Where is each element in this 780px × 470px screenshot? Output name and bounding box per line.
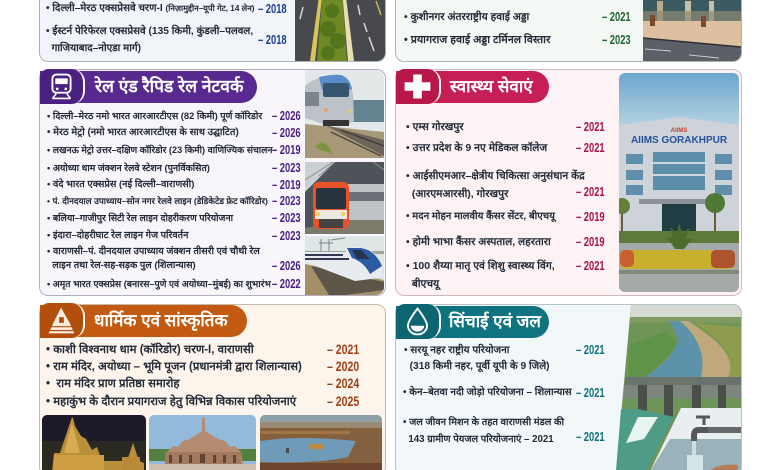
list item: ICMR RMRC: – 2021 — [576, 184, 605, 199]
list item: Homi Bhabha hospital: • होमी भाभा कैंसर अस्पताल, लहरतारा — [406, 236, 551, 248]
icon: temple — [40, 303, 85, 338]
list item: Kushinagar airport — [404, 9, 631, 24]
list item: Mahakumbh: • महाकुंभ के दौरान प्रयागराज हेतु विभिन्न विकास परियोजनाएं — [46, 396, 296, 408]
list item: Ballia-Ghazipur: – 2023 — [272, 210, 301, 225]
list item: Prayagraj airport: – 2023 — [602, 32, 631, 47]
photo: canal and water tap — [616, 305, 741, 470]
panel: religious and cultural — [39, 304, 386, 470]
list item: mother and child wing — [406, 258, 605, 290]
list item: freight corridor — [47, 193, 301, 208]
list item: Ken-Betwa link — [403, 385, 605, 400]
list item: Ayodhya station — [47, 160, 301, 175]
list item: AIIMS Gorakhpur: – 2021 — [576, 119, 605, 134]
list item: Namo Bharat: – 2026 — [272, 108, 301, 123]
list item: Kushinagar airport: – 2021 — [602, 9, 631, 24]
list item: Vande Bharat: – 2019 — [272, 177, 301, 192]
list item: Ram Mandir bhoomi pujan: • राम मंदिर, अयोध्या – भूमि पूजन (प्रधानमंत्री द्वारा शिलान्यास) — [46, 361, 302, 373]
list item: ICMR RMRC — [406, 169, 605, 200]
list item: Ken-Betwa link: • केन–बेतवा नदी जोड़ो परियोजना – शिलान्यास — [403, 387, 572, 398]
list item: nine medical colleges: – 2021 — [576, 140, 605, 155]
photo: expressway road — [295, 0, 385, 61]
heading: rail network: रेल एंड रैपिड रेल नेटवर्क — [95, 76, 243, 96]
list item: Kashi Vishwanath: • काशी विश्वनाथ धाम (कॉरिडोर) चरण-I, वाराणसी — [46, 344, 254, 356]
list item: Amrit Bharat: • अमृत भारत एक्सप्रेस (बनारस–पुणे एवं अयोध्या–मुंबई) का शुभारंभ — [47, 279, 271, 289]
list item: Meerut Metro: • मेरठ मेट्रो (नमो भारत आरआरटीएस के साथ उद्घाटित) — [47, 127, 239, 138]
photo: silver train — [305, 70, 384, 158]
list item: Meerut Metro — [47, 125, 301, 140]
list item: Saryu canal: (318 किमी नहर, पूर्वी यूपी के 9 जिले) — [410, 361, 550, 372]
list item: Ayodhya station: • अयोध्या धाम जंक्शन रेलवे स्टेशन (पुनर्विकसित) — [47, 163, 210, 173]
heading: religious and cultural — [40, 303, 247, 338]
icon: train — [40, 69, 85, 104]
list item: Pran Pratishtha: – 2024 — [327, 376, 359, 391]
list item: mother and child wing: – 2021 — [576, 258, 605, 273]
list item: Varanasi rail-road bridge: – 2026 — [272, 258, 301, 273]
heading: health services: स्वास्थ्य सेवाएं — [450, 77, 533, 96]
list item: freight corridor: • पं. दीनदयाल उपाध्याय–सोन नगर रेलवे लाइन (डेडिकेटेड फ्रेट कॉरिडोर) — [47, 196, 268, 206]
photo: Kashi Vishwanath at night — [42, 415, 146, 470]
list item: Ayodhya station: – 2023 — [272, 160, 301, 175]
heading: health services — [396, 69, 549, 104]
list item: AIIMS Gorakhpur: • एम्स गोरखपुर — [406, 121, 464, 133]
photo: orange metro train — [305, 162, 384, 234]
list item: Jal Jeevan Mission: • जल जीवन मिशन के तहत वाराणसी मंडल की — [403, 417, 564, 428]
list item: Mahakumbh — [46, 394, 359, 409]
list item: Delhi-Meerut Expressway: – 2018 — [258, 1, 287, 16]
list item: freight corridor: – 2023 — [272, 193, 301, 208]
heading: irrigation and water: सिंचाई एवं जल — [449, 312, 541, 331]
list item: nine medical colleges — [406, 140, 605, 155]
list item: nine medical colleges: • उत्तर प्रदेश के 9 नए मेडिकल कॉलेज — [406, 142, 547, 154]
list item: ICMR RMRC: (आरएमआरसी), गोरखपुर — [412, 188, 508, 200]
list item: Jal Jeevan Mission: 143 ग्रामीण पेयजल परियोजनाएं – 2021 — [408, 434, 554, 445]
list item: Indara-Dohrighat — [47, 228, 301, 243]
list item: Amrit Bharat: – 2022 — [272, 276, 301, 291]
list item: Prayagraj airport: • प्रयागराज हवाई अड्डा टर्मिनल विस्तार — [404, 34, 550, 46]
photo: AIIMS Gorakhpur building: AIIMS — [671, 128, 687, 134]
list item: Eastern Peripheral Expressway: – 2018 — [258, 32, 287, 47]
list item: ICMR RMRC: • आईसीएमआर–क्षेत्रीय चिकित्सा अनुसंधान केंद्र — [406, 170, 585, 182]
photo: Ram Mandir — [149, 415, 256, 470]
list item: Saryu canal: – 2021 — [576, 342, 605, 357]
list item: Varanasi rail-road bridge — [47, 245, 301, 273]
list item: Kashi Vishwanath: – 2021 — [327, 342, 359, 357]
list item: mother and child wing: • 100 शैय्या मातृ एवं शिशु स्वास्थ्य विंग, — [406, 260, 555, 272]
list item: Indara-Dohrighat: • इंदारा–दोहरीघाट रेल लाइन गेज परिवर्तन — [47, 230, 188, 241]
list item: Kushinagar airport: • कुशीनगर अंतरराष्ट्रीय हवाई अड्डा — [404, 11, 529, 23]
list item: Mahakumbh: – 2025 — [327, 394, 359, 409]
list item: Ken-Betwa link: – 2021 — [576, 385, 605, 400]
list item: AIIMS Gorakhpur — [406, 119, 605, 134]
list item: Eastern Peripheral Expressway — [46, 24, 287, 54]
list item: Prayagraj airport — [404, 32, 631, 47]
list item: Ram Mandir bhoomi pujan — [46, 359, 359, 374]
list item: Ballia-Ghazipur: • बलिया–गाजीपुर सिटी रेल लाइन दोहरीकरण परियोजना — [47, 213, 233, 223]
list item: Meerut Metro: – 2026 — [272, 125, 301, 140]
list item: Jal Jeevan Mission: – 2021 — [576, 429, 605, 444]
list item: Malaviya cancer centre: • मदन मोहन मालवीय कैंसर सेंटर, बीएचयू — [406, 211, 555, 222]
list item: Ram Mandir bhoomi pujan: – 2020 — [327, 359, 359, 374]
list item: Malaviya cancer centre — [406, 209, 605, 224]
list item: Kashi Vishwanath — [46, 342, 359, 357]
panel: irrigation and water — [395, 304, 742, 470]
panel: expressways — [39, 0, 386, 62]
list item: Saryu canal: • सरयू नहर राष्ट्रीय परियोजना — [404, 345, 509, 356]
panel: airports — [395, 0, 742, 62]
heading: irrigation and water — [396, 304, 549, 339]
list item: Jal Jeevan Mission — [403, 416, 605, 445]
photo: bullet train — [305, 236, 384, 295]
list item: Namo Bharat: • दिल्ली–मेरठ नमो भारत आरआरटीएस (82 किमी) पूर्ण कॉरिडोर — [47, 110, 262, 121]
list item: Lucknow Metro: • लखनऊ मेट्रो उत्तर–दक्षिण कॉरिडोर (23 किमी) वाणिज्यिक संचालन — [47, 145, 272, 155]
list item: Vande Bharat — [47, 177, 301, 192]
list item: Indara-Dohrighat: – 2023 — [272, 228, 301, 243]
list item: Eastern Peripheral Expressway: गाजियाबाद–नोएडा मार्ग) — [52, 43, 141, 54]
list item: Pran Pratishtha: • राम मंदिर प्राण प्रतिष्ठा समारोह — [46, 378, 180, 390]
heading: religious and cultural: धार्मिक एवं सांस्कृतिक — [94, 311, 228, 330]
list item: Amrit Bharat — [47, 276, 301, 291]
list item: Delhi-Meerut Expressway: • दिल्ली–मेरठ एक्सप्रेसवे चरण-I (निज़ामुद्दीन–यूपी गेट, 14 लेन) — [46, 3, 254, 14]
list item: Varanasi rail-road bridge: • वाराणसी–पं. दीनदयाल उपाध्याय जंक्शन तीसरी एवं चौथी रेल — [47, 246, 260, 257]
photo: AIIMS Gorakhpur building — [619, 73, 739, 292]
list item: Varanasi rail-road bridge: लाइन तथा रेल-सह-सड़क पुल (शिलान्यास) — [52, 260, 196, 271]
list item: Pran Pratishtha — [46, 376, 360, 391]
icon: medical cross — [396, 69, 441, 104]
list item: Lucknow Metro: – 2019 — [272, 142, 301, 157]
list item: Malaviya cancer centre: – 2019 — [576, 209, 605, 224]
heading: rail network — [40, 69, 257, 104]
panel: rail and rapid rail network — [39, 69, 386, 296]
photo: airport terminal — [643, 0, 741, 61]
list item: Ballia-Ghazipur — [47, 210, 301, 225]
list item: Homi Bhabha hospital: – 2019 — [576, 234, 605, 249]
list item: mother and child wing: बीएचयू — [412, 278, 439, 290]
list item: Delhi-Meerut Expressway — [46, 1, 287, 16]
list item: Namo Bharat — [47, 108, 301, 123]
photo: Mahakumbh crowd — [260, 415, 382, 470]
list item: Lucknow Metro — [47, 142, 301, 157]
photo: AIIMS Gorakhpur building: AIIMS GORAKHPUR — [631, 135, 728, 146]
list item: Eastern Peripheral Expressway: • ईस्टर्न पेरिफेरल एक्सप्रेसवे (135 किमी, कुंडली–पलवल, — [46, 26, 253, 37]
list item: Vande Bharat: • वंदे भारत एक्सप्रेस (नई दिल्ली–वाराणसी) — [47, 179, 194, 190]
list item: Saryu canal — [404, 342, 605, 372]
list item: Homi Bhabha hospital — [406, 234, 605, 249]
icon: water drop — [396, 304, 441, 339]
panel: health services — [395, 69, 742, 296]
